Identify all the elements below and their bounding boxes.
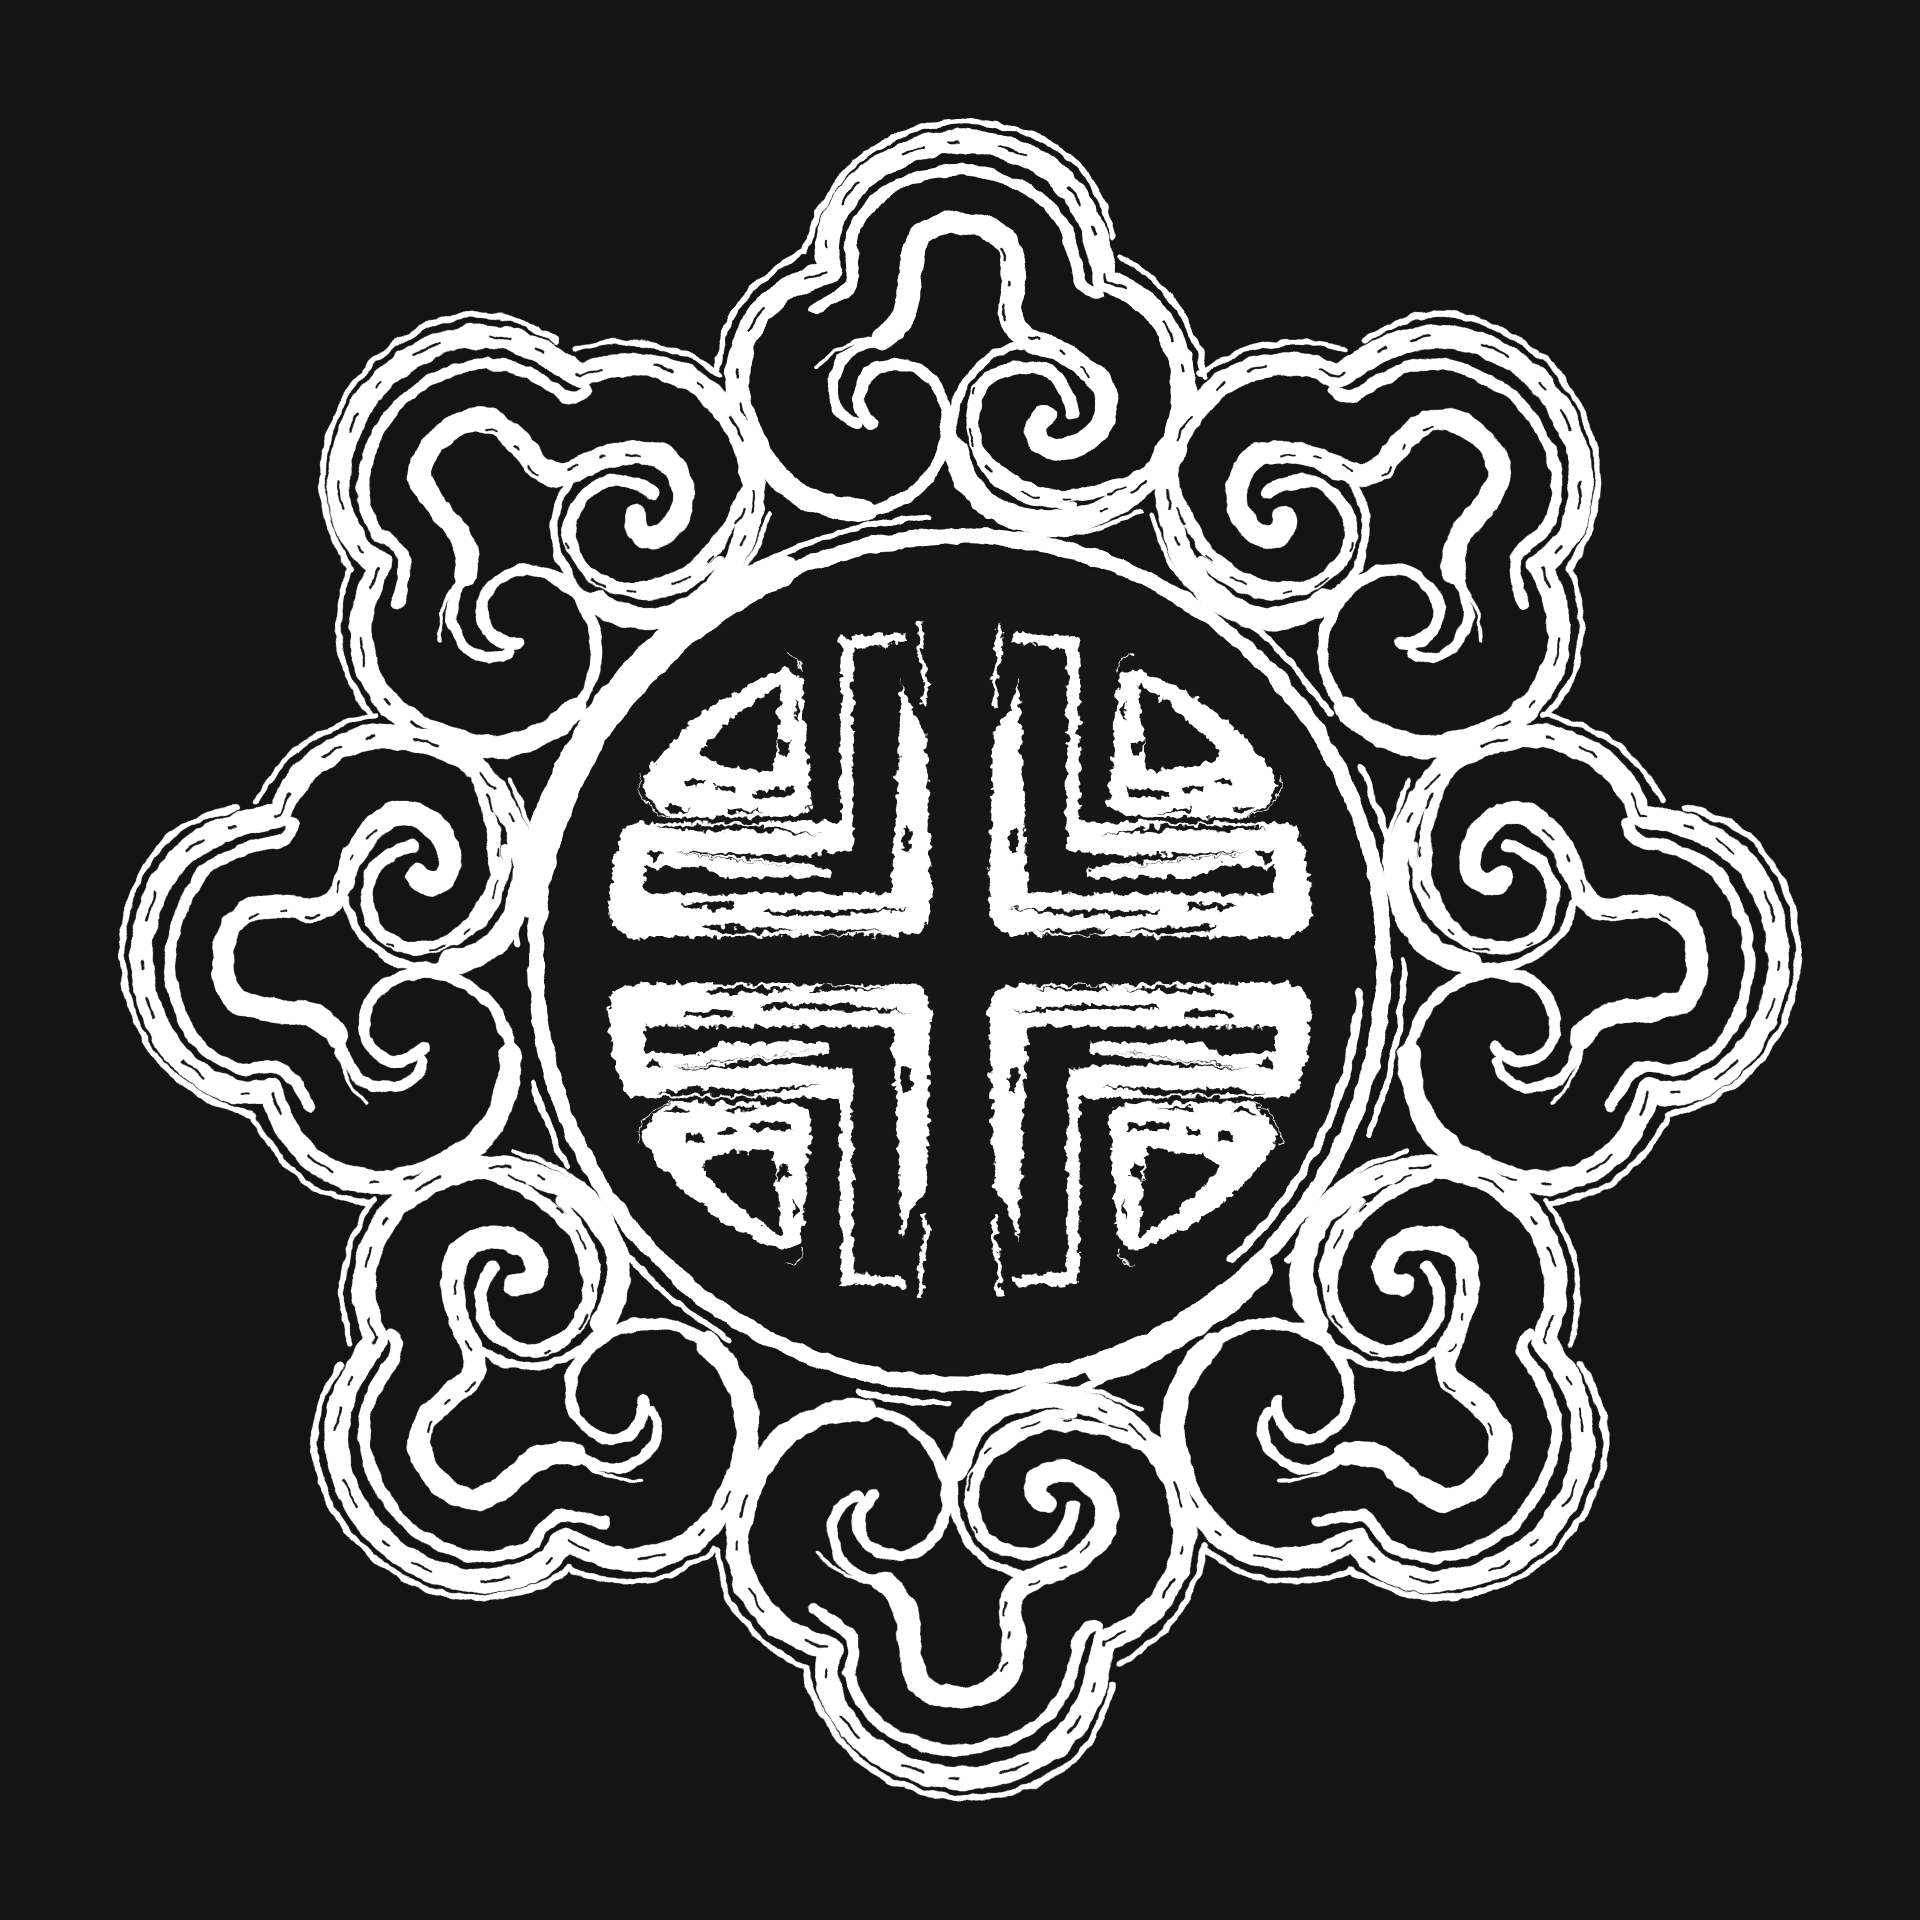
cloud petal: north-west <box>196 194 832 831</box>
symbol quadrant: upper right <box>989 623 1312 937</box>
symbol quadrant: lower left <box>608 983 931 1297</box>
cloud petal: south-east <box>1089 1088 1726 1724</box>
symbol quadrant: upper left <box>608 623 931 937</box>
cloud petal: south <box>717 1385 1205 1798</box>
ring <box>516 516 1404 1404</box>
brushed medallion <box>122 122 1798 1798</box>
cloud petal: north <box>717 122 1205 535</box>
central disc <box>546 546 1374 1374</box>
symbol quadrant: lower right <box>989 983 1312 1297</box>
cloud petal: west <box>122 715 535 1203</box>
cloud petal: east <box>1385 715 1798 1203</box>
shou longevity symbol <box>608 623 1312 1297</box>
cloud petal: north-east <box>1088 194 1724 831</box>
cloud petal: south-west <box>194 1088 831 1724</box>
